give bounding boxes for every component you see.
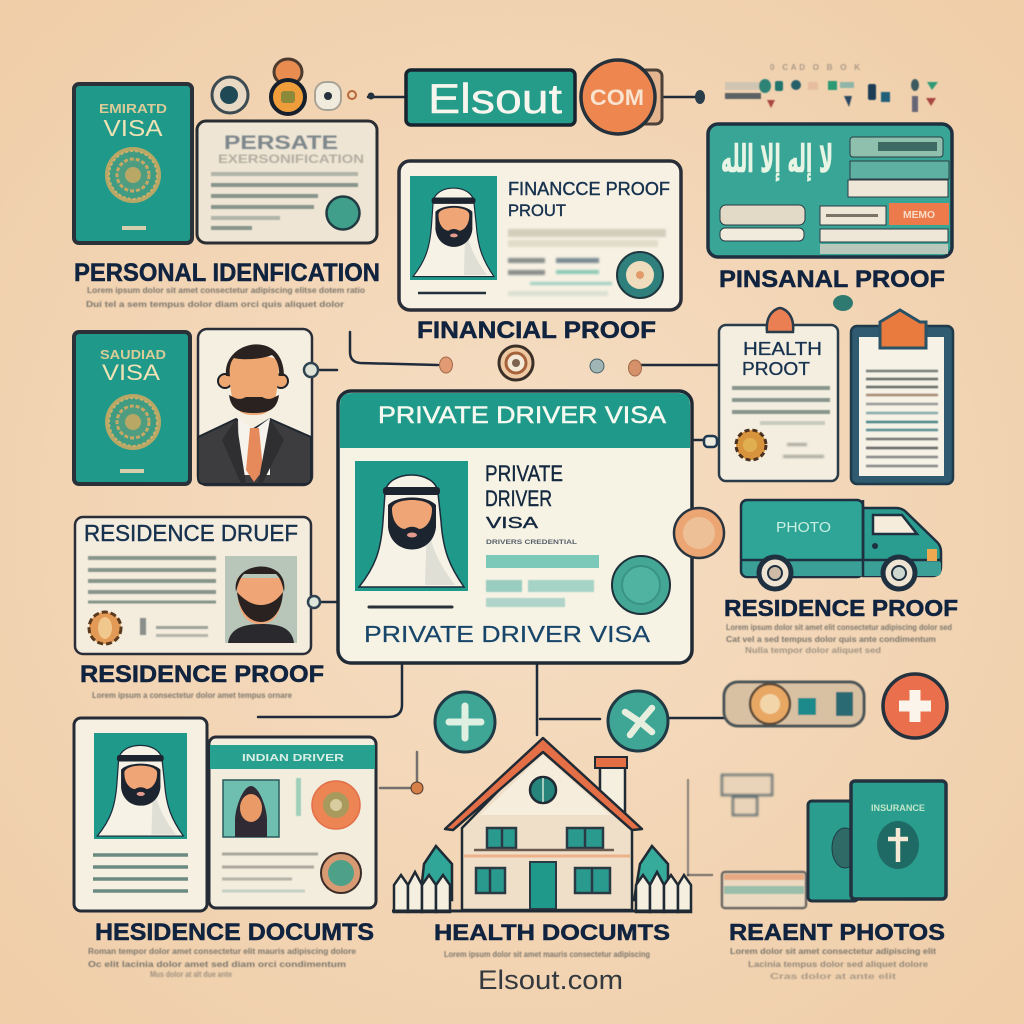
health proof heading: HEALTH xyxy=(743,339,822,359)
passport 2 heading: VISA xyxy=(102,360,160,385)
caption: residence documents: Oc elit lacinia dolor amet sed diam orci condimentum xyxy=(88,960,346,969)
passport 2 heading xyxy=(100,347,166,385)
panel: saudi document: لا إله إلا الله xyxy=(721,137,833,182)
house body xyxy=(462,745,632,910)
caption: residence documents: Roman tempor dolor amet consectetur elit mauris adipiscing dolore xyxy=(88,947,357,956)
residence card stamp xyxy=(89,612,121,644)
round window xyxy=(530,777,556,803)
connector lines xyxy=(258,97,725,875)
connector dot xyxy=(695,90,705,104)
id card text xyxy=(296,778,301,816)
panel: residence card xyxy=(75,517,311,654)
main card title: DRIVERS CREDENTIAL xyxy=(486,540,577,546)
icon: orange plus xyxy=(883,674,947,738)
house illustration xyxy=(392,738,692,912)
main card header: PRIVATE DRIVER VISA xyxy=(378,402,666,429)
health proof heading: PROOT xyxy=(742,359,810,379)
main card header xyxy=(340,393,690,448)
personal card subheading: EXERSONIFICATION xyxy=(218,152,364,166)
caption: residence proof right: Nulla tempor dolor aliquet sed xyxy=(745,646,881,655)
panel: financial card xyxy=(399,161,681,310)
clipboard clip xyxy=(880,310,926,348)
residence card heading: RESIDENCE DRUEF xyxy=(84,520,298,546)
document lines xyxy=(93,855,188,891)
id card photo xyxy=(223,780,279,837)
header icons left xyxy=(212,59,374,114)
financial subheading: PROUT xyxy=(508,201,566,220)
main card title: DRIVER xyxy=(485,486,552,511)
id card orange seal xyxy=(312,781,360,829)
lower windows xyxy=(476,868,610,893)
panel: document with portrait xyxy=(74,718,207,911)
logo: COM badge: COM xyxy=(590,85,644,110)
health proof heading xyxy=(742,339,822,379)
caption: recent photos: Lacinia tempus dolor sed aliquet dolore xyxy=(748,960,929,969)
truck icon xyxy=(741,500,941,589)
id card header: INDIAN DRIVER xyxy=(242,753,345,764)
main card title xyxy=(485,461,577,546)
personal card heading: PERSATE xyxy=(224,133,338,154)
man in suit xyxy=(198,344,311,484)
heading: health documents: HEALTH DOCUMTS xyxy=(434,920,670,945)
main card stamp xyxy=(612,556,670,614)
caption: personal identification xyxy=(86,286,365,309)
connector node xyxy=(704,436,717,447)
health proof small text xyxy=(783,443,824,458)
financial photo xyxy=(410,176,497,280)
logo: Elsout xyxy=(406,70,575,125)
panel: clipboard xyxy=(851,310,953,484)
caption: residence proof left: Lorem ipsum a consectetur dolor amet tempus ornare xyxy=(92,691,293,700)
panel: saudi document xyxy=(708,124,952,257)
caption: residence proof right xyxy=(726,623,952,655)
passport 1 heading xyxy=(99,101,167,141)
marker xyxy=(833,295,853,311)
logo: Elsout: Elsout xyxy=(428,75,562,122)
header icons right: 0 CAD O B O K xyxy=(770,63,860,72)
id card small seal xyxy=(321,853,361,893)
icon: green emblem xyxy=(608,691,668,751)
icon: faint stamp xyxy=(722,775,772,815)
panel: id card xyxy=(209,737,376,908)
door xyxy=(530,862,556,909)
panel: portrait card xyxy=(198,329,312,485)
health proof lines xyxy=(732,388,830,423)
upper windows xyxy=(487,828,603,848)
caption: residence documents: Mus dolor at alt due ante xyxy=(150,970,232,979)
personal card lines xyxy=(211,174,358,228)
health proof pin xyxy=(767,308,793,332)
passport 1 heading: VISA xyxy=(104,115,163,141)
panel: health proof xyxy=(719,308,838,481)
icon: chain device xyxy=(724,682,864,726)
ground line xyxy=(392,910,692,912)
financial heading: FINANCCE PROOF xyxy=(508,179,670,199)
roof xyxy=(445,738,642,830)
caption: recent photos: Cras dolor at ante elit xyxy=(770,972,897,981)
footer: website: Elsout.com xyxy=(478,965,623,995)
caption: recent photos: Lorem dolor sit amet consectetur adipiscing elit xyxy=(730,947,936,956)
main card bars xyxy=(486,555,599,607)
main card footer: PRIVATE DRIVER VISA xyxy=(364,621,651,647)
heading: residence proof right: RESIDENCE PROOF xyxy=(724,595,958,621)
main card title: VISA xyxy=(486,515,538,532)
clipboard lines xyxy=(866,371,938,466)
heading: personal proof: PINSANAL PROOF xyxy=(719,266,945,293)
id card lines xyxy=(222,854,318,891)
logo: COM badge xyxy=(581,60,662,134)
caption: personal identification: Lorem ipsum dolor sit amet consectetur adipiscing elitse dotem ratio xyxy=(87,286,365,295)
main card photo xyxy=(355,461,468,591)
heading: residence documents: HESIDENCE DOCUMTS xyxy=(95,919,374,946)
orange tag: MEMO xyxy=(903,210,935,221)
panel: personal card xyxy=(197,121,377,243)
panel: main private driver visa card xyxy=(338,391,692,663)
orange tag xyxy=(889,203,949,225)
document photo xyxy=(94,733,187,839)
connector node xyxy=(304,363,318,377)
passport 1 seal xyxy=(105,147,161,203)
residence card photo xyxy=(225,556,297,643)
residence card signature xyxy=(140,618,208,637)
caption: residence documents xyxy=(88,947,357,979)
badge: coin xyxy=(674,508,724,558)
id card header xyxy=(210,745,375,769)
fence right xyxy=(634,846,691,912)
heading: recent photos: REAENT PHOTOS xyxy=(729,919,945,945)
form fields xyxy=(720,137,949,254)
financial lines xyxy=(508,229,666,296)
caption: personal identification: Dui tel a sem tempus dolor diam orci quis aliquet dolor xyxy=(86,300,344,309)
passport 2 heading: SAUDIAD xyxy=(100,347,166,362)
passport 2 seal xyxy=(105,394,161,450)
heading: residence proof left: RESIDENCE PROOF xyxy=(80,661,324,688)
chimney xyxy=(595,757,627,815)
heading: financial proof: FINANCIAL PROOF xyxy=(417,317,656,344)
caption: health documents: Lorem ipsum dolor sit amet mauris consectetur adipiscing xyxy=(444,950,650,959)
panel: passport 2 xyxy=(74,332,190,484)
health proof stamp xyxy=(736,430,766,460)
truck label: PHOTO xyxy=(776,519,831,536)
caption: residence proof right: Cat vel a sed tempus dolor quis ante condimentum xyxy=(726,635,936,644)
small pin xyxy=(411,782,423,794)
back passport xyxy=(808,801,858,901)
residence card lines xyxy=(88,558,216,602)
front passport: INSURANCE xyxy=(871,803,925,813)
connector node xyxy=(308,596,320,608)
heading: personal identification: PERSONAL IDENFICATION xyxy=(74,259,380,287)
personal card stamp xyxy=(326,196,360,230)
icon: small card xyxy=(722,872,806,908)
main card title: PRIVATE xyxy=(485,461,563,486)
passport 1 heading: EMIRATD xyxy=(99,101,167,116)
fence left xyxy=(394,846,452,912)
node markers xyxy=(440,346,642,380)
panel: passports with cross xyxy=(808,781,946,901)
financial stamp xyxy=(617,252,663,298)
panel: passport 1 xyxy=(74,84,192,243)
main card signature xyxy=(369,606,452,608)
caption: recent photos xyxy=(730,947,936,981)
icon: green plus xyxy=(435,692,495,752)
header icons right xyxy=(725,63,938,112)
caption: residence proof right: Lorem ipsum dolor sit amet elit consectetur adipiscing dolor sed xyxy=(726,623,952,632)
